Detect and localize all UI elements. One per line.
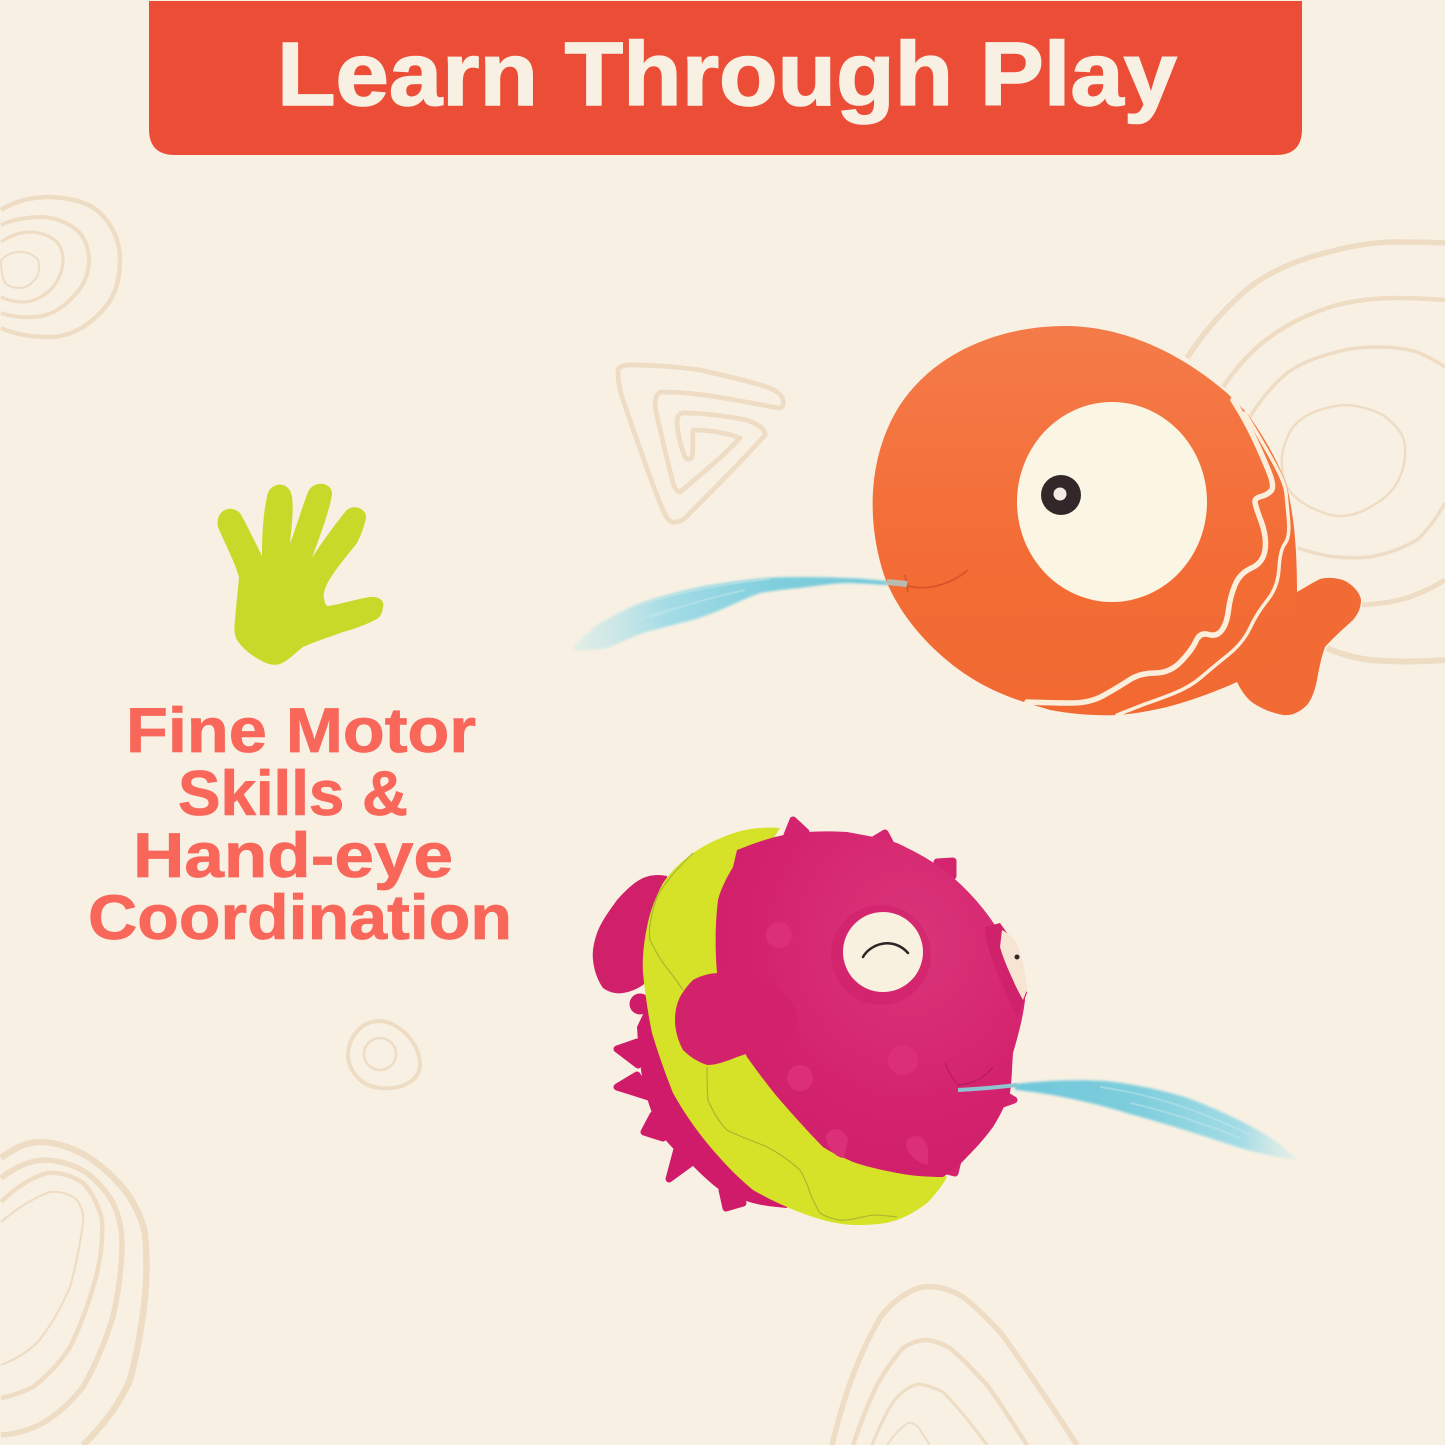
side fin: [675, 973, 797, 1065]
puffer eye: [843, 912, 923, 992]
background doodle: right rings: [1187, 242, 1445, 662]
body spikes: [740, 820, 1014, 1173]
background doodle: bottom-left rings: [1, 1142, 146, 1445]
bumps: [766, 922, 928, 1165]
benefit text: fine motor skills: Fine Motor: [126, 696, 476, 766]
band seam lines: [649, 853, 897, 1220]
puffer eye ring: [831, 905, 931, 1005]
benefit text: fine motor skills: Skills &: [178, 759, 408, 829]
background doodle: bottom-center rings: [832, 1287, 1077, 1445]
benefit text: fine motor skills: [88, 696, 512, 953]
tail fin: [593, 875, 667, 993]
background doodle: triangle spiral: [618, 365, 783, 522]
toy: pink pufferfish: [593, 820, 1027, 1225]
puffer mouth: [945, 1063, 993, 1085]
puffer eye line: [863, 943, 908, 957]
fish eye: [1017, 402, 1207, 602]
puffer spout: [958, 1085, 1017, 1090]
icon: green hand: [218, 484, 383, 665]
side eye: [985, 923, 1027, 1018]
fish spout: [887, 582, 907, 584]
water stream: orange fish: [572, 577, 887, 650]
background doodle: small ring: [348, 1021, 420, 1088]
fish mouth: [905, 570, 968, 592]
body: [716, 831, 1025, 1177]
fish pupil: [1041, 475, 1081, 515]
benefit text: fine motor skills: Coordination: [88, 883, 512, 953]
water stream: pufferfish: [958, 1080, 1298, 1160]
title banner: [149, 1, 1302, 155]
benefit text: fine motor skills: Hand-eye: [133, 821, 453, 891]
fish stripes: [1027, 400, 1289, 715]
toy: orange fish: [873, 326, 1361, 715]
background doodle: top-left rings: [1, 197, 120, 337]
fish body: [873, 326, 1297, 715]
green band: [643, 828, 947, 1225]
title: Learn Through Play: [277, 25, 1177, 125]
fish tail: [1237, 578, 1361, 715]
back of body and spikes: [617, 997, 800, 1208]
